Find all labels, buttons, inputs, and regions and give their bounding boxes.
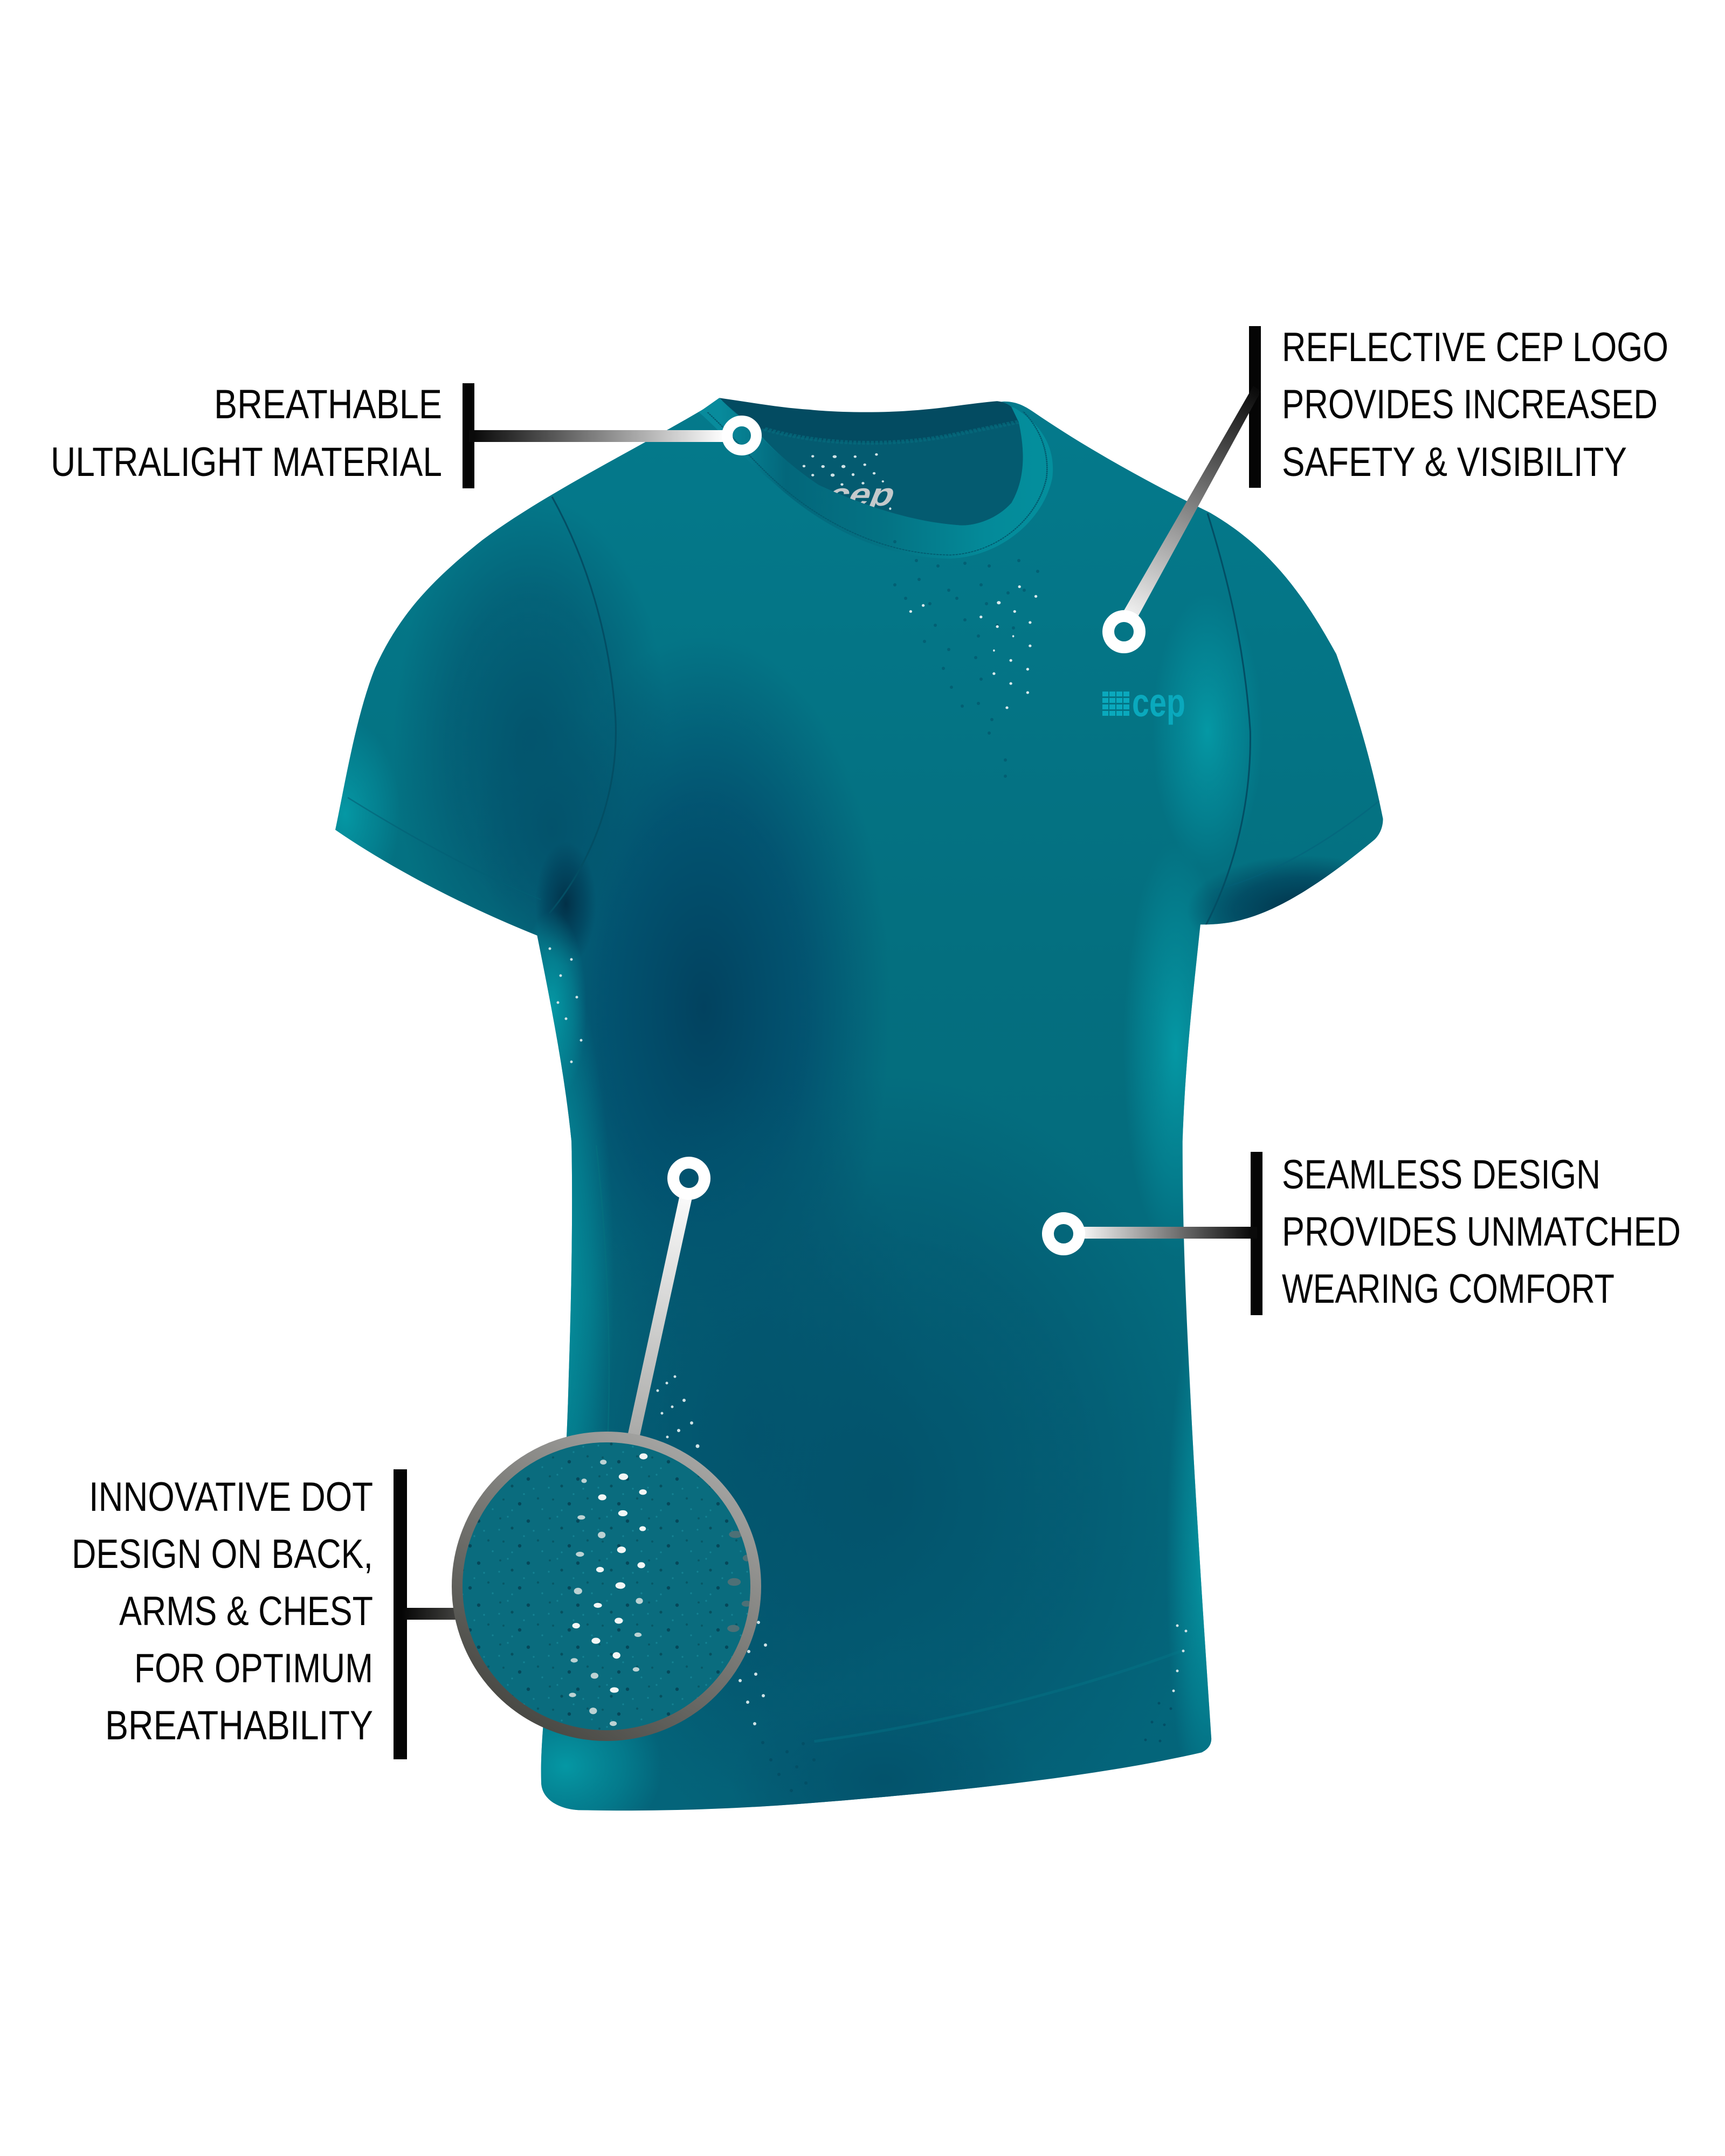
front collar stitching: [708, 411, 1047, 555]
callout text: WEARING COMFORT: [1282, 1266, 1614, 1312]
left armhole seam: [549, 497, 616, 914]
callout text: [1282, 1152, 1681, 1312]
marker ring: [1108, 616, 1140, 647]
hem embossed dots: [761, 1702, 1172, 1792]
callout text: [1282, 324, 1668, 485]
faint embossed dots: [893, 540, 1039, 778]
vertical bar: [463, 383, 474, 488]
marker ring: [673, 1163, 705, 1194]
shirt body with shading: [335, 400, 1383, 1811]
callout text: DESIGN ON BACK,: [72, 1531, 373, 1577]
left side seam: [596, 1145, 609, 1490]
connector line: [1074, 1227, 1257, 1239]
vertical bar: [1249, 326, 1261, 488]
magnifier lens: [457, 1437, 756, 1736]
callout: innovative dot design: [72, 1163, 756, 1759]
callout text: BREATHABLE: [214, 382, 442, 427]
callout text: INNOVATIVE DOT: [89, 1474, 373, 1520]
vertical bar: [1251, 1152, 1262, 1315]
callout: seamless design: [1048, 1152, 1681, 1315]
inner neck perforation dots: [803, 453, 892, 510]
back collar band: [719, 398, 1019, 443]
back collar stitching: [764, 422, 1019, 443]
callout text: FOR OPTIMUM: [134, 1646, 373, 1691]
callout: breathable ultralight material: [51, 382, 756, 488]
callout text: SAFETY & VISIBILITY: [1282, 439, 1627, 485]
callout: reflective cep logo: [1108, 324, 1668, 647]
connector line: [469, 430, 727, 442]
sleeve hem stitching right: [1296, 800, 1379, 857]
fabric texture: [461, 1441, 752, 1732]
infographic canvas: [53, 326, 1679, 1811]
chest cep logo: [1102, 680, 1185, 725]
front collar band: [699, 398, 1053, 558]
t-shirt product illustration: [335, 398, 1383, 1811]
connector to lens: [402, 1608, 474, 1620]
callout text: [72, 1474, 373, 1749]
right armhole seam: [1205, 513, 1250, 927]
callout text: SEAMLESS DESIGN: [1282, 1152, 1600, 1198]
connector line up to marker: [627, 1195, 692, 1438]
inside back of shirt: [757, 420, 1023, 526]
marker ring: [1048, 1218, 1079, 1249]
vertical bar: [394, 1469, 407, 1759]
logo grid icon: [1102, 692, 1129, 716]
diagonal connector: [1121, 386, 1261, 623]
back neck cep label: cep: [822, 476, 902, 513]
bright through-holes: [909, 585, 1037, 709]
sleeve hem stitching left: [347, 797, 430, 845]
callout text: ARMS & CHEST: [119, 1588, 373, 1634]
callout text: BREATHABILITY: [105, 1703, 373, 1749]
neck opening and collar: [699, 398, 1053, 558]
callout text: ULTRALIGHT MATERIAL: [51, 439, 442, 485]
marker ring: [727, 421, 756, 450]
lens ring: [457, 1437, 756, 1736]
side ventilation dots: [549, 948, 1187, 1725]
perforation dots: [569, 1453, 751, 1726]
callout text: [51, 382, 442, 485]
logo wordmark: cep: [1132, 680, 1185, 725]
chest ventilation dots: [893, 540, 1039, 778]
